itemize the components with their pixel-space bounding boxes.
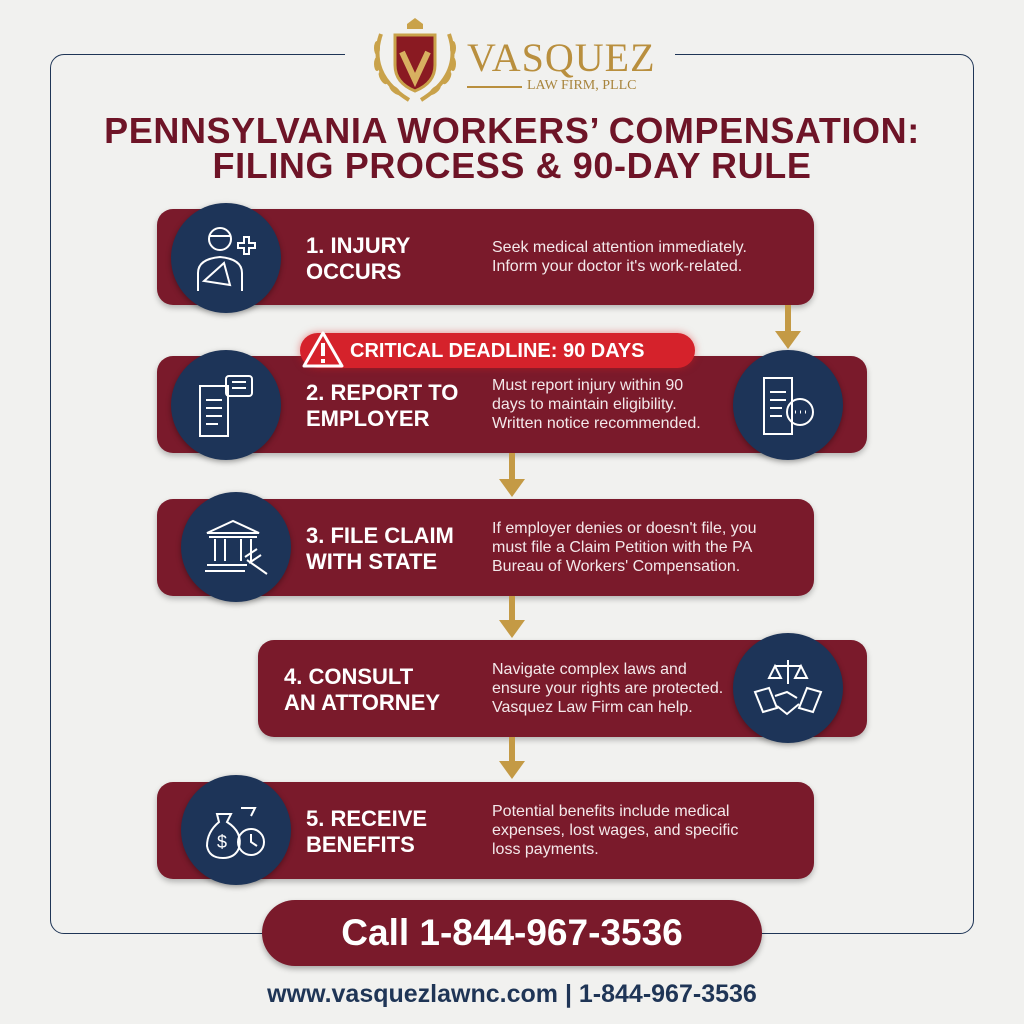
heading 5 <box>306 806 427 857</box>
icon: document with chat <box>171 350 281 460</box>
title <box>104 110 920 186</box>
call button: Call 1-844-967-3536 <box>341 912 683 953</box>
arrow 1-2 <box>775 305 801 349</box>
icon: warning <box>302 332 344 368</box>
desc 1: Seek medical attention immediately. <box>492 239 747 256</box>
title: FILING PROCESS & 90-DAY RULE <box>213 145 811 186</box>
icon: money bag and clock: $ <box>217 832 227 852</box>
desc 3: If employer denies or doesn't file, you <box>492 520 757 537</box>
desc 4: Vasquez Law Firm can help. <box>492 699 693 716</box>
desc 4: ensure your rights are protected. <box>492 680 723 697</box>
badge: critical deadline <box>300 333 695 368</box>
icon: document with speech bubble <box>733 350 843 460</box>
step 2 <box>157 356 867 453</box>
arrow 4-5 <box>499 737 525 779</box>
step 5 <box>157 782 814 879</box>
icon: crest <box>374 18 456 102</box>
desc 2: Written notice recommended. <box>492 415 701 432</box>
desc 5: Potential benefits include medical <box>492 803 729 820</box>
heading 2 <box>306 380 458 431</box>
heading 1: 1. INJURY <box>306 233 410 258</box>
heading 1: OCCURS <box>306 259 401 284</box>
call button <box>262 900 762 966</box>
desc 2: Must report injury within 90 <box>492 377 683 394</box>
desc 3: must file a Claim Petition with the PA <box>492 539 752 556</box>
desc 4 <box>492 661 723 716</box>
desc 3 <box>492 520 757 575</box>
icon: injured worker <box>171 203 281 313</box>
title: PENNSYLVANIA WORKERS’ COMPENSATION: <box>104 110 920 151</box>
frame border <box>50 54 974 934</box>
step 3 <box>157 499 814 596</box>
arrow 3-4 <box>499 596 525 638</box>
icon: courthouse <box>181 492 291 602</box>
icon: scales and handshake <box>733 633 843 743</box>
badge: critical deadline: CRITICAL DEADLINE: 90 DAYS <box>350 340 644 362</box>
desc 5: expenses, lost wages, and specific <box>492 822 738 839</box>
heading 4 <box>284 664 440 715</box>
logo: LAW FIRM, PLLC <box>527 78 636 93</box>
heading 4: 4. CONSULT <box>284 664 413 689</box>
heading 3: 3. FILE CLAIM <box>306 523 454 548</box>
heading 2: EMPLOYER <box>306 406 429 431</box>
desc 4: Navigate complex laws and <box>492 661 687 678</box>
arrow 2-3 <box>499 453 525 497</box>
logo text: VASQUEZ <box>467 35 656 80</box>
desc 2 <box>492 377 701 432</box>
heading 3: WITH STATE <box>306 549 437 574</box>
footer text: www.vasquezlawnc.com | 1-844-967-3536 <box>267 980 757 1008</box>
desc 5 <box>492 803 738 858</box>
heading 1 <box>306 233 410 284</box>
heading 3 <box>306 523 454 574</box>
heading 4: AN ATTORNEY <box>284 690 440 715</box>
desc 5: loss payments. <box>492 841 599 858</box>
desc 1: Inform your doctor it's work-related. <box>492 258 742 275</box>
heading 5: BENEFITS <box>306 832 415 857</box>
desc 2: days to maintain eligibility. <box>492 396 677 413</box>
desc 1 <box>492 239 747 275</box>
logo <box>345 8 675 108</box>
step 1 <box>157 209 814 305</box>
icon: money bag and clock <box>181 775 291 885</box>
heading 5: 5. RECEIVE <box>306 806 427 831</box>
desc 3: Bureau of Workers' Compensation. <box>492 558 740 575</box>
step 4 <box>258 640 867 737</box>
heading 2: 2. REPORT TO <box>306 380 458 405</box>
